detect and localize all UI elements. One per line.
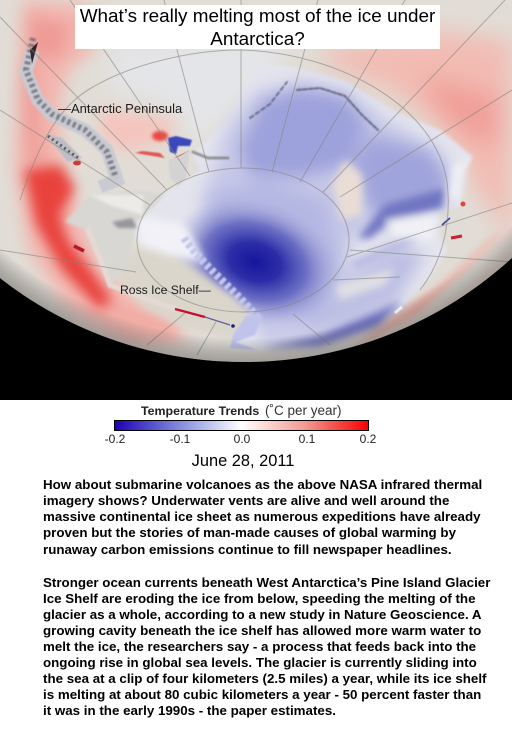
red patch, centre-left ocean [100, 108, 178, 152]
label: Antarctic Peninsula: —Antarctic Peninsula [58, 101, 183, 116]
text: proven but the stories of man-made causes of global warming by [43, 525, 456, 540]
legend: temperature trends colour bar [105, 403, 377, 446]
map: Antarctica temperature trends [0, 0, 512, 400]
ice sheet, blue interior [200, 80, 455, 345]
central dark blue cold spot [179, 205, 332, 321]
text: ongoing rise in global sea levels. The glacier is currently sliding into [43, 655, 477, 670]
text: massive continental ice sheet as numerous expeditions have already [43, 509, 481, 524]
text: is melting at about 80 cubic kilometers a year - 50 percent faster than [43, 687, 481, 702]
text: runaway carbon emissions continue to fill newspaper headlines. [43, 542, 452, 557]
title: Antarctica? [210, 29, 305, 50]
text: imagery shows? Underwater vents are alive and well around the [43, 493, 449, 508]
text: Stronger ocean currents beneath West Antarctica’s Pine Island Glacier [43, 575, 490, 590]
ice sheet, pale base [135, 63, 473, 350]
Antarctic Peninsula mountains [26, 38, 190, 187]
thin red and blue anomaly streaks [74, 136, 466, 328]
paragraph: Pine Island Glacier [43, 575, 490, 718]
legend: temperature trends colour bar: (˚C per year) [265, 403, 342, 418]
text: it was in the early 1990s - the paper estimates. [43, 703, 336, 718]
text: Ice Shelf are eroding the ice from below, speeding the melting of the [43, 591, 476, 606]
legend: temperature trends colour bar: 0.2 [360, 432, 377, 446]
Ross ice shelf and west Antarctica [65, 190, 263, 350]
legend: temperature trends colour bar: -0.1 [170, 432, 191, 446]
legend: temperature trends colour bar: 0.0 [234, 432, 251, 446]
coastal mountain ridge [193, 82, 378, 158]
pink ocean area, east [325, 30, 512, 240]
text: glacier as a whole, according to a new study in Nature Geoscience. A [43, 607, 482, 622]
text: How about submarine volcanoes as the above NASA infrared thermal [43, 477, 482, 492]
legend: temperature trends colour bar: Temperature Trends [141, 404, 259, 418]
title [75, 5, 440, 49]
text: growing cavity beneath the ice shelf has allowed more warm water to [43, 623, 481, 638]
paragraph: submarine volcanoes [43, 477, 482, 557]
text: melt the ice, the researchers say - a process that feeds back into the [43, 639, 476, 654]
label: Ross Ice Shelf: Ross Ice Shelf— [120, 283, 212, 297]
legend: temperature trends colour bar: 0.1 [299, 432, 316, 446]
red ocean band, west [15, 0, 190, 345]
legend: temperature trends colour bar: -0.2 [105, 432, 126, 446]
graticule [0, 0, 512, 355]
text: the sea at a clip of four kilometers (2.5 miles) a year, while its ice shelf [43, 671, 486, 686]
title: What’s really melting most of the ice under [80, 6, 435, 27]
pale cool ocean near the top [109, 49, 286, 141]
date: June 28, 2011 [192, 452, 294, 470]
